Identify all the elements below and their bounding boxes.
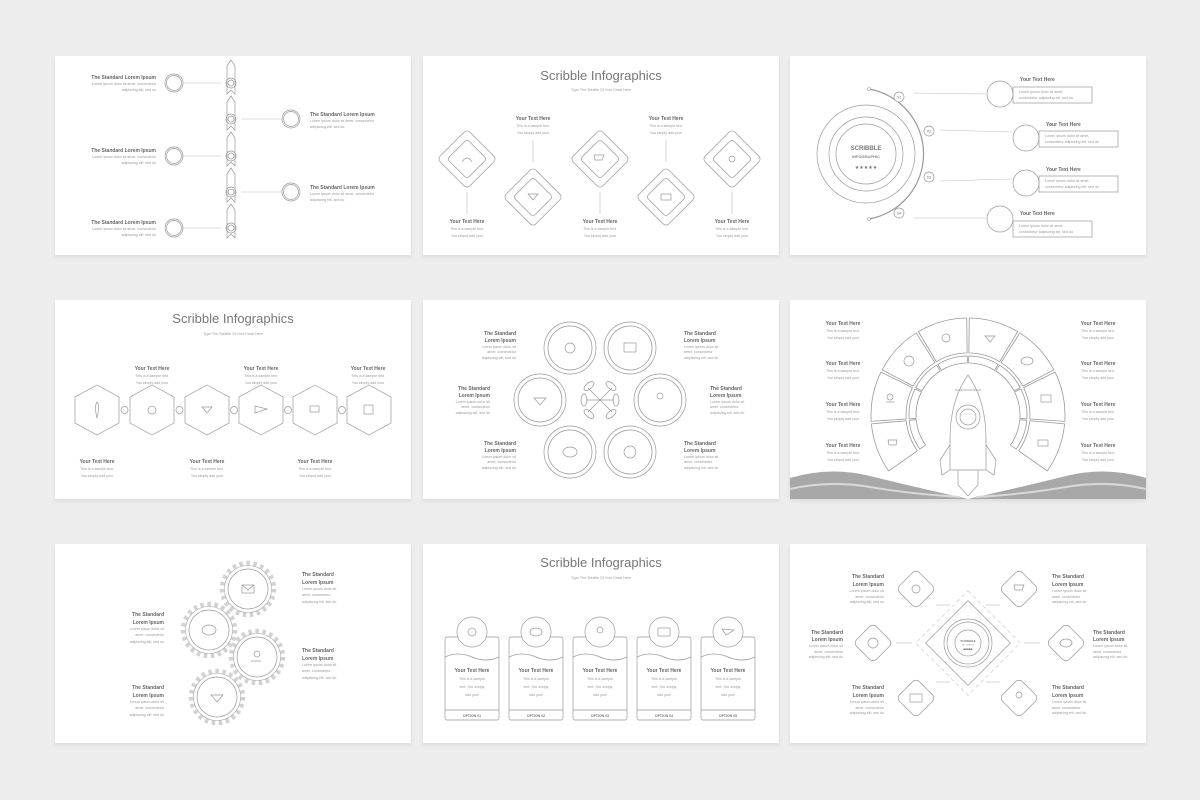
texts: Your Text Here <box>244 366 279 372</box>
texts: You simply add your <box>650 131 683 135</box>
panel: center diamond <box>790 544 1146 743</box>
texts: This is a sample text. <box>80 467 114 471</box>
card texts: add your <box>593 693 608 697</box>
panel: timeline ribbon <box>55 56 411 255</box>
panel: center diamond: amet, consectetur <box>1052 706 1081 710</box>
right items: consectetur adipiscing elit, sed do <box>1045 140 1099 144</box>
card texts: OPTION 02 <box>527 714 545 718</box>
texts: This is a sample text. <box>1081 410 1115 414</box>
right items: adipiscing elit, sed do <box>310 125 344 129</box>
card texts: OPTION 01 <box>463 714 481 718</box>
panel: circle arc <box>790 56 1146 255</box>
texts: You simply add your <box>1082 417 1115 421</box>
texts: Lorem Ipsum <box>853 693 885 699</box>
texts: adipiscing elit, sed do <box>482 466 516 470</box>
title <box>172 311 294 336</box>
texts: This is a sample text. <box>450 227 484 231</box>
right items: Your Text Here <box>1020 77 1055 83</box>
texts: This is a sample text. <box>583 227 617 231</box>
title: Type The Subtitle Of Your Great Here <box>203 332 263 336</box>
texts: The Standard <box>484 441 516 447</box>
panel: gears: Lorem Ipsum <box>133 693 165 699</box>
card texts: text. You simply <box>716 685 741 689</box>
card texts: This is a sample <box>523 677 549 681</box>
right items: Lorem ipsum dolor sit amet, <box>1045 179 1089 183</box>
right items: Your Text Here <box>1046 122 1081 128</box>
texts: You simply add your <box>81 474 114 478</box>
texts <box>456 331 517 470</box>
central circles <box>817 105 915 203</box>
texts: This is a sample text. <box>135 374 169 378</box>
texts: You simply add your <box>352 381 385 385</box>
central circles: ★★★★★ <box>855 165 878 171</box>
texts: Your Text Here <box>516 116 551 122</box>
panel: gears <box>55 544 411 743</box>
rocket <box>940 375 996 496</box>
texts: adipiscing elit, sed do <box>456 411 490 415</box>
texts: Your Text Here <box>351 366 386 372</box>
texts <box>80 366 386 478</box>
texts: Lorem Ipsum <box>485 448 517 454</box>
texts: Your Text Here <box>80 459 115 465</box>
texts: Your Text Here <box>1081 443 1116 449</box>
texts: This is a sample text. <box>826 369 860 373</box>
panel: option cards <box>423 544 779 743</box>
panel: gears: amet, consectetur <box>135 706 165 710</box>
card texts: text. You simply <box>524 685 549 689</box>
panel: center diamond: Lorem ipsum dolor sit <box>1093 644 1127 648</box>
texts: Lorem Ipsum <box>812 637 844 643</box>
texts: The Standard <box>302 648 334 654</box>
texts: Lorem ipsum dolor sit <box>302 663 336 667</box>
texts: adipiscing elit, sed do <box>302 600 336 604</box>
texts: This is a sample text. <box>244 374 278 378</box>
card texts: OPTION 03 <box>591 714 609 718</box>
panel: hexagons <box>55 300 411 499</box>
left items: adipiscing elit, sed do <box>122 161 156 165</box>
waves <box>790 471 1146 499</box>
panel: flower circles: adipiscing elit, sed do <box>684 356 718 360</box>
texts: Your Text Here <box>826 402 861 408</box>
panel: center diamond: adipiscing elit, sed do <box>1052 711 1086 715</box>
panel: flower circles: Lorem Ipsum <box>684 338 716 344</box>
right items: Lorem ipsum dolor sit amet, consectetur <box>310 119 375 123</box>
central circles: INFOGRAPHIC <box>852 154 880 159</box>
central diamond <box>916 591 1020 695</box>
arc with numbers: 04 <box>897 210 902 216</box>
panel: center diamond: Lorem ipsum dolor sit <box>1052 700 1086 704</box>
spine ribbons <box>226 60 236 238</box>
texts: Lorem ipsum dolor sit <box>850 589 884 593</box>
texts: You simply add your <box>716 234 749 238</box>
center flower <box>581 380 619 420</box>
texts: You simply add your <box>517 131 550 135</box>
texts: Your Text Here <box>135 366 170 372</box>
left items: adipiscing elit, sed do <box>122 233 156 237</box>
card texts: add your <box>465 693 480 697</box>
left items: The Standard Lorem Ipsum <box>91 148 157 154</box>
left items: Lorem ipsum dolor sit amet, consectetur <box>92 155 157 159</box>
card texts: This is a sample <box>715 677 741 681</box>
panel: gears: amet, consectetur <box>135 633 165 637</box>
left items: adipiscing elit, sed do <box>122 88 156 92</box>
arc segments <box>868 315 1068 472</box>
panel: center diamond: amet, consectetur <box>1052 595 1081 599</box>
title: Scribble Infographics <box>172 311 294 326</box>
texts: Lorem ipsum dolor sit <box>482 345 516 349</box>
texts: The Standard <box>811 630 843 636</box>
title <box>540 555 662 580</box>
panel: flower circles: adipiscing elit, sed do <box>684 466 718 470</box>
left items: The Standard Lorem Ipsum <box>91 220 157 226</box>
card texts <box>455 668 746 718</box>
title: Type The Subtitle Of Your Great Here <box>571 88 631 92</box>
texts: Lorem Ipsum <box>853 582 885 588</box>
texts: adipiscing elit, sed do <box>850 711 884 715</box>
texts: This is a sample text. <box>1081 369 1115 373</box>
texts <box>826 321 1116 462</box>
panel: gears: Lorem Ipsum <box>133 620 165 626</box>
panel: flower circles <box>423 300 779 499</box>
texts <box>809 574 885 715</box>
texts: You simply add your <box>245 381 278 385</box>
card texts: add your <box>529 693 544 697</box>
right items <box>241 110 375 202</box>
arc with numbers <box>868 88 934 220</box>
texts: adipiscing elit, sed do <box>482 356 516 360</box>
panel: diamonds <box>423 56 779 255</box>
texts: This is a sample text. <box>649 124 683 128</box>
texts: You simply add your <box>827 458 860 462</box>
panel: center diamond: Lorem Ipsum <box>1052 582 1084 588</box>
panel: flower circles: Lorem Ipsum <box>684 448 716 454</box>
texts: amet, consectetur <box>855 706 885 710</box>
texts: Lorem Ipsum <box>302 656 334 662</box>
texts: You simply add your <box>136 381 169 385</box>
central circles: SCRIBBLE <box>851 146 881 152</box>
texts: This is a sample text. <box>298 467 332 471</box>
texts: adipiscing elit, sed do <box>850 600 884 604</box>
panel: flower circles: Lorem ipsum dolor sit <box>684 455 718 459</box>
texts: Your Text Here <box>826 321 861 327</box>
cards <box>445 617 755 720</box>
card texts: add your <box>657 693 672 697</box>
central diamond: ■■■■■ <box>963 647 973 651</box>
title: Type The Subtitle Of Your Great Here <box>571 576 631 580</box>
texts: This is a sample text. <box>1081 451 1115 455</box>
texts: Your Text Here <box>1081 361 1116 367</box>
texts: You simply add your <box>1082 376 1115 380</box>
panel: gears: adipiscing elit, sed do <box>130 713 164 717</box>
panel: center diamond: The Standard <box>1052 685 1084 691</box>
small diamonds <box>853 569 1086 718</box>
panel: flower circles: The Standard <box>710 386 742 392</box>
right items: consectetur adipiscing elit, sed do <box>1019 230 1073 234</box>
card texts: add your <box>721 693 736 697</box>
panel: gears: adipiscing elit, sed do <box>130 640 164 644</box>
panel: gears: The Standard <box>132 612 164 618</box>
texts: Your Text Here <box>190 459 225 465</box>
texts: This is a sample text. <box>1081 329 1115 333</box>
texts: Lorem ipsum dolor sit <box>809 644 843 648</box>
left items: Lorem ipsum dolor sit amet, consectetur <box>92 227 157 231</box>
texts: Your Text Here <box>715 219 750 225</box>
texts: Your Text Here <box>298 459 333 465</box>
texts: Lorem Ipsum <box>485 338 517 344</box>
card texts: Your Text Here <box>647 668 682 674</box>
texts: amet, consectetur <box>814 650 844 654</box>
card texts: text. You simply <box>460 685 485 689</box>
panel: flower circles: Lorem ipsum dolor sit <box>710 400 744 404</box>
panel: center diamond: Lorem Ipsum <box>1093 637 1125 643</box>
texts: You simply add your <box>827 336 860 340</box>
card texts: Your Text Here <box>519 668 554 674</box>
panel: center diamond: adipiscing elit, sed do <box>1052 600 1086 604</box>
card texts: This is a sample <box>651 677 677 681</box>
texts: Lorem ipsum dolor sit <box>302 587 336 591</box>
texts: Lorem Ipsum <box>459 393 491 399</box>
panel: flower circles: The Standard <box>684 441 716 447</box>
texts: amet, consectetur <box>487 460 517 464</box>
texts: This is a sample text. <box>190 467 224 471</box>
title: Scribble Infographics <box>540 68 662 83</box>
right items: Your Text Here <box>1046 167 1081 173</box>
arc with numbers: 01 <box>897 94 902 100</box>
texts: You simply add your <box>191 474 224 478</box>
right items <box>914 77 1118 237</box>
left items: Lorem ipsum dolor sit amet, consectetur <box>92 82 157 86</box>
right items: consectetur adipiscing elit, sed do <box>1019 96 1073 100</box>
texts: Your Text Here <box>826 361 861 367</box>
central diamond: INFOGRAPHIC <box>962 644 975 646</box>
title <box>540 68 662 92</box>
texts: You simply add your <box>451 234 484 238</box>
panel: flower circles: amet, consectetur <box>684 460 713 464</box>
card texts: OPTION 04 <box>655 714 673 718</box>
card texts: Your Text Here <box>711 668 746 674</box>
arc with numbers: 02 <box>927 128 932 134</box>
circles <box>514 322 686 478</box>
panel: center diamond: The Standard <box>1052 574 1084 580</box>
texts: This is a sample text. <box>715 227 749 231</box>
texts: The Standard <box>852 685 884 691</box>
texts: The Standard <box>302 572 334 578</box>
card texts: OPTION 05 <box>719 714 737 718</box>
panel: flower circles: Lorem Ipsum <box>710 393 742 399</box>
texts: This is a sample text. <box>826 410 860 414</box>
panel: flower circles: amet, consectetur <box>710 405 739 409</box>
texts: You simply add your <box>827 417 860 421</box>
texts: adipiscing elit, sed do <box>809 655 843 659</box>
card texts: This is a sample <box>459 677 485 681</box>
right items: Lorem ipsum dolor sit amet, consectetur <box>310 192 375 196</box>
texts: Your Text Here <box>649 116 684 122</box>
texts: Your Text Here <box>1081 402 1116 408</box>
title: Scribble Infographics <box>540 555 662 570</box>
texts: amet, consectetur <box>487 350 517 354</box>
panel: flower circles: amet, consectetur <box>684 350 713 354</box>
texts: Lorem Ipsum <box>302 580 334 586</box>
card texts: Your Text Here <box>455 668 490 674</box>
texts: amet, consectetur <box>855 595 885 599</box>
texts <box>450 116 750 238</box>
hexagon chain <box>75 385 391 435</box>
texts: Your Text Here <box>826 443 861 449</box>
panel: center diamond: Lorem Ipsum <box>1052 693 1084 699</box>
texts: adipiscing elit, sed do <box>302 676 336 680</box>
texts: The Standard <box>852 574 884 580</box>
icons <box>886 334 1051 446</box>
panel: flower circles: The Standard <box>684 331 716 337</box>
card texts: text. You simply <box>588 685 613 689</box>
texts: amet, consectetur <box>302 669 331 673</box>
texts: The Standard <box>484 331 516 337</box>
panel: flower circles: Lorem ipsum dolor sit <box>684 345 718 349</box>
texts: amet, consectetur <box>302 593 331 597</box>
texts: This is a sample text. <box>826 451 860 455</box>
right items: consectetur adipiscing elit, sed do <box>1045 185 1099 189</box>
gear shapes <box>183 563 283 723</box>
texts: You simply add your <box>584 234 617 238</box>
card texts: This is a sample <box>587 677 613 681</box>
right items: Your Text Here <box>1020 211 1055 217</box>
right items: adipiscing elit, sed do <box>310 198 344 202</box>
left items <box>91 74 221 237</box>
texts: You simply add your <box>1082 336 1115 340</box>
texts: You simply add your <box>827 376 860 380</box>
card texts: Your Text Here <box>583 668 618 674</box>
texts: amet, consectetur <box>461 405 491 409</box>
diamond shapes <box>437 129 762 227</box>
texts: The Standard <box>458 386 490 392</box>
texts: You simply add your <box>1082 458 1115 462</box>
texts: Lorem ipsum dolor sit <box>482 455 516 459</box>
texts: Your Text Here <box>583 219 618 225</box>
card texts: text. You simply <box>652 685 677 689</box>
panel: center diamond: amet, consectetur <box>1093 650 1122 654</box>
texts: Lorem ipsum dolor sit <box>850 700 884 704</box>
central diamond: SCRIBBLE <box>960 639 976 643</box>
panel: gears: The Standard <box>132 685 164 691</box>
left items: The Standard Lorem Ipsum <box>91 75 157 81</box>
texts <box>302 572 336 680</box>
texts: Your Text Here <box>450 219 485 225</box>
right items: Lorem ipsum dolor sit amet, <box>1019 90 1063 94</box>
panel: gears: Lorem ipsum dolor sit <box>130 627 164 631</box>
texts: This is a sample text. <box>351 374 385 378</box>
texts: Your Text Here <box>1081 321 1116 327</box>
panel: flower circles: adipiscing elit, sed do <box>710 411 744 415</box>
right items: Lorem ipsum dolor sit amet, <box>1045 134 1089 138</box>
right items: The Standard Lorem Ipsum <box>310 112 375 118</box>
right items: Lorem ipsum dolor sit amet, <box>1019 224 1063 228</box>
panel: center diamond: The Standard <box>1093 630 1125 636</box>
texts: You simply add your <box>299 474 332 478</box>
panel: center diamond: adipiscing elit, sed do <box>1093 655 1127 659</box>
arc with numbers: 03 <box>927 174 932 180</box>
panel: gears: Lorem ipsum dolor sit <box>130 700 164 704</box>
texts: This is a sample text. <box>826 329 860 333</box>
panel: rocket arc <box>790 300 1146 499</box>
right items: The Standard Lorem Ipsum <box>310 185 375 191</box>
panel: center diamond: Lorem ipsum dolor sit <box>1052 589 1086 593</box>
texts: Lorem ipsum dolor sit <box>456 400 490 404</box>
texts: This is a sample text. <box>516 124 550 128</box>
